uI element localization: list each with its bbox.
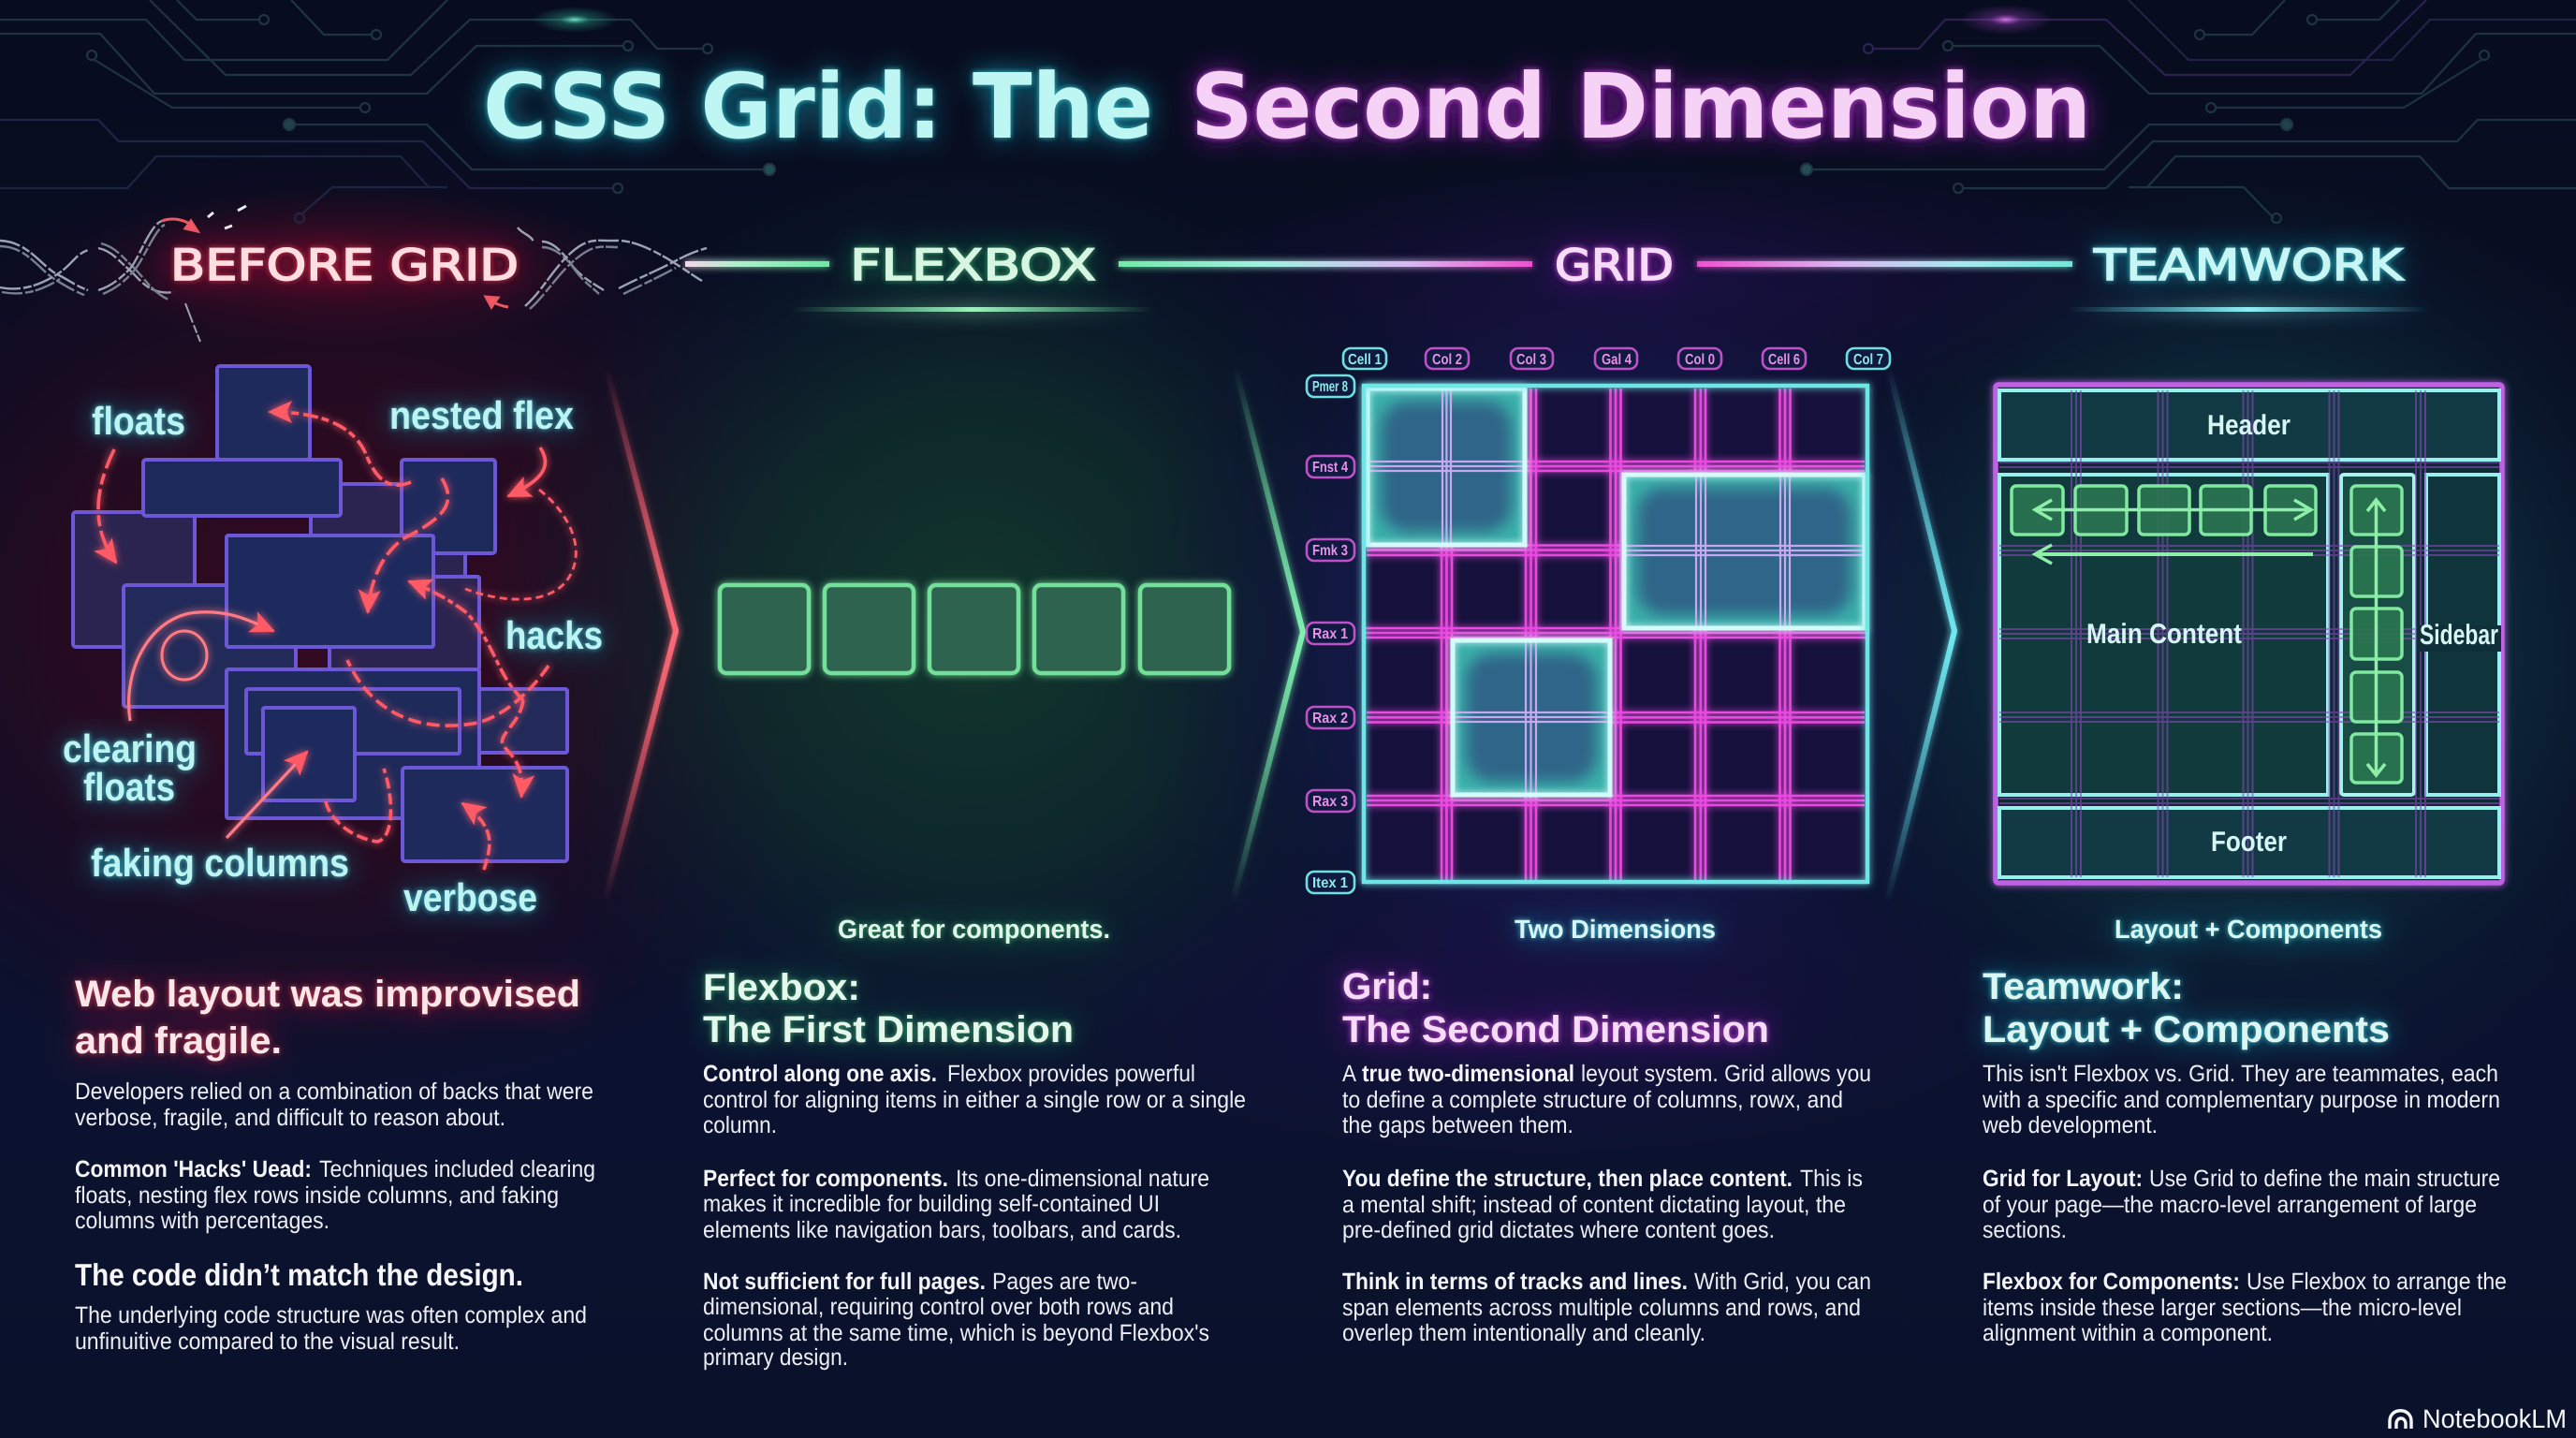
paragraph: two-dimensional <box>1342 1061 1871 1138</box>
closing paragraph <box>75 1302 587 1355</box>
text column: teamwork <box>1982 966 2507 1346</box>
paragraph: one axis: Control along one axis. <box>703 1061 937 1087</box>
row tags: Fnst 4 <box>1312 460 1348 476</box>
caption: Two Dimensions: Two Dimensions <box>1515 915 1716 944</box>
hacks paragraph: columns with percentages. <box>75 1208 329 1234</box>
paragraph: define structure: You define the structure, then place content. <box>1342 1166 1793 1192</box>
subheading: The code didn’t match the design. <box>75 1257 523 1292</box>
overlapping boxes <box>73 366 567 861</box>
heading: The Second Dimension <box>1342 1009 1769 1050</box>
region text labels: Header <box>2207 410 2291 441</box>
paragraph: grid for layout <box>1983 1166 2500 1243</box>
paragraph: full pages <box>703 1269 1209 1371</box>
paragraph: tracks and lines <box>1342 1269 1871 1346</box>
connector line: Grid to Teamwork <box>1697 261 2072 267</box>
caption: Layout + Components: Layout + Components <box>2115 915 2382 944</box>
paragraph: one axis: control for aligning items in either a single row or a single <box>703 1087 1246 1113</box>
region: Header <box>1999 390 2499 460</box>
brand: NotebookLM <box>2390 1404 2567 1433</box>
text column: flexbox <box>703 967 1246 1371</box>
paragraph: full pages: primary design. <box>703 1344 848 1371</box>
paragraph: flexbox for components: alignment within a component. <box>1983 1320 2273 1346</box>
paragraph: tracks and lines: span elements across multiple columns and rows, and <box>1342 1295 1861 1321</box>
circuit traces: left <box>0 0 775 223</box>
row tags: Fmk 3 <box>1312 543 1348 559</box>
wordmark: NotebookLM <box>2422 1404 2567 1433</box>
outer magenta frame <box>1996 385 2502 883</box>
row tags <box>1307 375 1354 893</box>
underline glow: Teamwork <box>2068 307 2429 312</box>
text column: before grid <box>75 974 595 1355</box>
paragraph: two-dimensional: A <box>1342 1061 1356 1087</box>
flex items column <box>2351 486 2402 783</box>
row tags: Rax 3 <box>1312 794 1348 810</box>
paragraph: two-dimensional: leyout system. Grid allows you <box>1581 1061 1871 1087</box>
paragraph: grid for layout: of your page—the macro-level arrangement of large <box>1983 1192 2477 1218</box>
hacks paragraph: Techniques included clearing <box>319 1156 595 1182</box>
paragraph: components: Perfect for components. <box>703 1166 948 1192</box>
spanning area: middle <box>1453 640 1610 795</box>
arrow: vertical both ways <box>2367 500 2385 775</box>
paragraph: teammates <box>1982 1061 2500 1138</box>
underline glow: Flexbox <box>792 307 1153 312</box>
row tags: Itex 1 <box>1312 875 1348 891</box>
paragraph: define structure <box>1342 1166 1863 1243</box>
paragraph: full pages: Not sufficient for full pages. <box>703 1269 986 1295</box>
region: Footer <box>1999 808 2499 877</box>
paragraph: tracks and lines: With Grid, you can <box>1694 1269 1871 1295</box>
paragraph: flexbox for components: items inside these larger sections—the micro-level <box>1983 1295 2462 1321</box>
row tags: Pmer 8 <box>1312 379 1348 395</box>
row tags: Rax 2 <box>1312 711 1348 726</box>
column tags: Col 7 <box>1853 352 1883 368</box>
column tags: Gal 4 <box>1602 352 1632 368</box>
labels on diagram: nested flex <box>389 393 575 437</box>
label: FLEXBOX: FLEXBOX <box>850 240 1096 290</box>
circuit traces: right <box>1801 0 2576 223</box>
spanning area: top-left <box>1368 389 1525 545</box>
sidebar label backing <box>2417 625 2501 652</box>
hacks paragraph <box>75 1156 595 1234</box>
spanning area: right <box>1624 475 1865 628</box>
heading: Teamwork: <box>1983 966 2184 1007</box>
paragraph: flexbox for components: Use Flexbox to arrange the <box>2247 1269 2507 1295</box>
grid outer border <box>1364 386 1867 882</box>
panel: before grid chaotic layout diagram <box>63 366 603 919</box>
region text labels: Sidebar <box>2420 620 2498 651</box>
column tags: Col 2 <box>1432 352 1462 368</box>
hacks paragraph: floats, nesting flex rows inside columns, and faking <box>75 1182 559 1209</box>
paragraph: grid for layout: Grid for Layout: <box>1983 1166 2143 1192</box>
region: flex column container <box>2341 475 2414 795</box>
heading: and fragile. <box>75 1020 282 1062</box>
heading: The First Dimension <box>703 1009 1074 1050</box>
region text labels <box>2086 410 2498 858</box>
panel: grid diagram <box>1307 348 1890 893</box>
region: Sidebar <box>2426 475 2499 795</box>
paragraph: full pages: dimensional, requiring control over both rows and <box>703 1294 1174 1320</box>
paragraph: full pages: Pages are two- <box>992 1269 1137 1295</box>
arrow: chevron cyan <box>1887 368 1954 902</box>
intro paragraph: Developers relied on a combination of backs that were <box>75 1078 593 1105</box>
column tags: Cell 6 <box>1768 352 1800 368</box>
label: TEAMWORK: TEAMWORK <box>2093 240 2405 290</box>
label: BEFORE GRID: BEFORE GRID <box>170 240 519 290</box>
labels on diagram: faking columns <box>91 841 349 885</box>
paragraph: two-dimensional: the gaps between them. <box>1342 1112 1573 1138</box>
arrow: chevron green <box>1233 368 1303 902</box>
paragraph: define structure: This is <box>1800 1166 1863 1192</box>
caption: Great for components.: Great for components. <box>838 915 1110 944</box>
heading: Flexbox: <box>703 967 860 1008</box>
region: Main Content <box>1999 475 2328 795</box>
paragraph: one axis: column. <box>703 1112 777 1138</box>
region text labels: Main Content <box>2086 619 2242 650</box>
paragraph: components <box>703 1166 1209 1243</box>
paragraph: components: makes it incredible for building self-contained UI <box>703 1191 1160 1217</box>
paragraph: tracks and lines: Think in terms of tracks and lines. <box>1342 1269 1688 1295</box>
labels on diagram: floats <box>92 399 185 443</box>
paragraph: flexbox for components: Flexbox for Components: <box>1983 1269 2240 1295</box>
panel: teamwork page layout <box>1996 385 2502 883</box>
timeline header <box>0 206 2429 342</box>
paragraph: teammates: with a specific and complementary purpose in modern <box>1982 1087 2500 1113</box>
paragraph: teammates: This isn't Flexbox vs. Grid. They are teammates, each <box>1983 1061 2498 1087</box>
text column: grid <box>1342 966 1871 1346</box>
barbed wire left and right of Before Grid <box>0 221 707 342</box>
label: GRID: GRID <box>1555 240 1674 290</box>
heading <box>1983 966 2390 1050</box>
paragraph: grid for layout: Use Grid to define the main structure <box>2149 1166 2500 1192</box>
heading: Layout + Components <box>1983 1009 2390 1050</box>
paragraph: tracks and lines: overlep them intentionally and cleanly. <box>1342 1320 1705 1346</box>
paragraph: two-dimensional: true two-dimensional <box>1362 1061 1574 1087</box>
heading: Grid: <box>1342 966 1432 1007</box>
arrow: chevron red <box>605 368 676 902</box>
paragraph: components: Its one-dimensional nature <box>956 1166 1209 1192</box>
heading <box>1342 966 1769 1050</box>
column tags: Col 0 <box>1685 352 1715 368</box>
paragraph: flexbox for components <box>1983 1269 2507 1346</box>
paragraph: define structure: a mental shift; instead of content dictating layout, the <box>1342 1192 1846 1218</box>
region text labels: Footer <box>2211 827 2287 858</box>
closing paragraph: unfinuitive compared to the visual result. <box>75 1328 460 1355</box>
tangled red arrows <box>98 412 576 870</box>
paragraph: one axis: Flexbox provides powerful <box>947 1061 1195 1087</box>
intro paragraph: verbose, fragile, and difficult to reason about. <box>75 1105 505 1131</box>
flex items row <box>2012 486 2316 535</box>
title <box>483 54 2091 159</box>
paragraph: teammates: web development. <box>1982 1112 2158 1138</box>
arrow: horizontal left <box>2035 545 2313 564</box>
hacks paragraph: Common 'Hacks' Uead: <box>75 1156 312 1182</box>
paragraph: grid for layout: sections. <box>1983 1217 2067 1243</box>
wire red arrow tips <box>162 206 508 307</box>
labels on diagram: verbose <box>403 875 537 919</box>
magenta track lines <box>1364 389 1867 880</box>
paragraph: one axis <box>703 1061 1246 1138</box>
grid background <box>1364 386 1867 882</box>
column tags <box>1343 348 1890 369</box>
labels on diagram: hacks <box>505 613 603 657</box>
icon: notebook arcs <box>2390 1411 2411 1429</box>
paragraph: full pages: columns at the same time, which is beyond Flexbox's <box>703 1320 1209 1346</box>
row tags: Rax 1 <box>1312 626 1348 642</box>
connector line: to Flexbox <box>685 261 829 267</box>
column tags: Col 3 <box>1516 352 1546 368</box>
paragraph: two-dimensional: to define a complete structure of columns, rowx, and <box>1342 1087 1843 1113</box>
paragraph: define structure: pre-defined grid dictates where content goes. <box>1342 1217 1775 1243</box>
heading <box>703 967 1074 1050</box>
connector line: Flexbox to Grid <box>1119 261 1532 267</box>
closing paragraph: The underlying code structure was often complex and <box>75 1302 587 1328</box>
heading <box>75 974 580 1062</box>
paragraph: components: elements like navigation bars, toolbars, and cards. <box>703 1217 1181 1243</box>
arrow: horizontal main axis both ways <box>2035 500 2311 520</box>
title part: Second Dimension: Second Dimension <box>1191 54 2091 159</box>
faint grid overlay lines <box>1999 390 2499 877</box>
intro paragraph <box>75 1078 593 1131</box>
labels on diagram: clearing <box>63 726 197 770</box>
labels on diagram <box>63 393 603 919</box>
heading: Web layout was improvised <box>75 974 580 1015</box>
column tags: Cell 1 <box>1348 352 1382 368</box>
title part: CSS Grid: The: CSS Grid: The <box>483 54 1153 159</box>
labels on diagram: floats <box>83 765 175 809</box>
panel: flexbox row of five items <box>720 585 1229 673</box>
